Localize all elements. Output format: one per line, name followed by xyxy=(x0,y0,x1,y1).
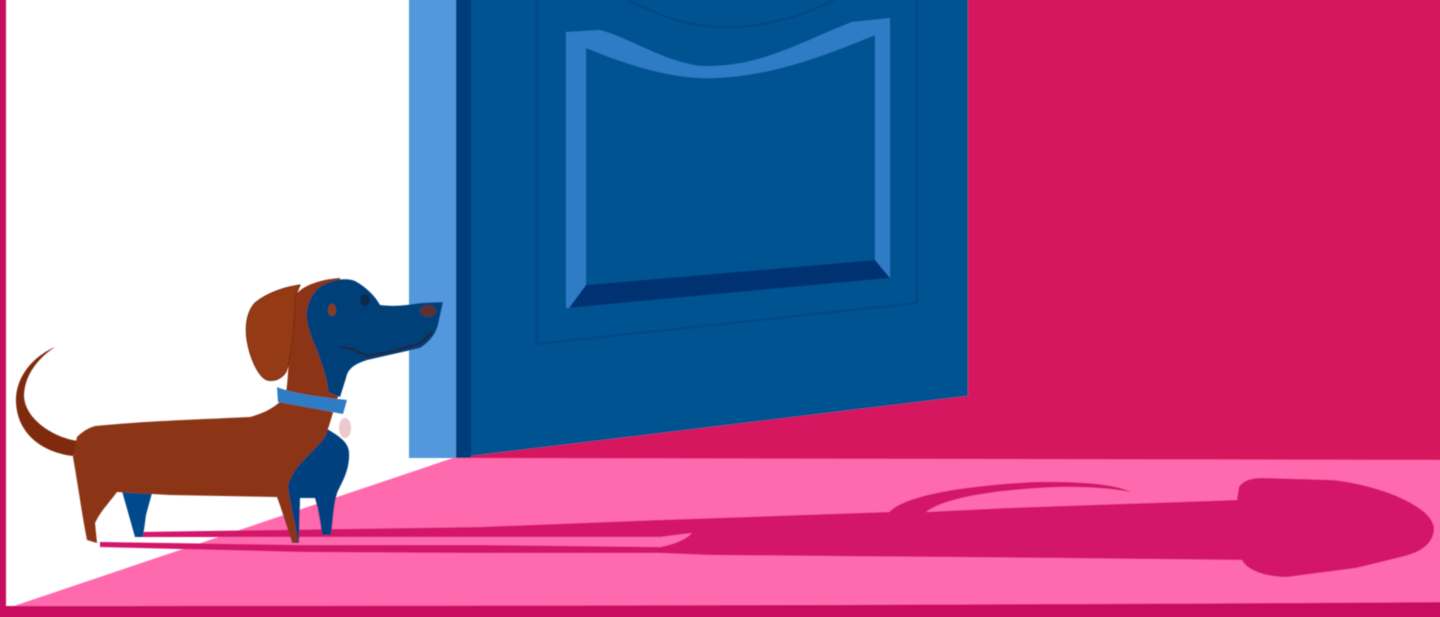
door panel shadow bevel xyxy=(569,260,890,308)
dog mouth xyxy=(340,332,433,356)
dog far eye xyxy=(360,294,370,306)
dog ear xyxy=(246,285,300,381)
dog collar xyxy=(277,387,347,414)
dog back leg (far) xyxy=(122,491,152,537)
door inner panel xyxy=(586,35,875,285)
dog head xyxy=(307,279,443,397)
dog nose xyxy=(420,305,436,317)
cast shadow of the dog on the floor xyxy=(100,478,1434,577)
door xyxy=(409,0,968,458)
pink floor xyxy=(8,458,1440,608)
door outer panel outline xyxy=(537,0,917,344)
door jamb xyxy=(409,0,457,458)
door inner panel frame xyxy=(566,18,890,308)
dog body xyxy=(73,278,345,543)
dog front leg and chest (blue) xyxy=(285,425,349,543)
dog xyxy=(16,278,443,543)
door top arc xyxy=(628,0,834,27)
dog tail xyxy=(16,347,78,456)
magenta wall beyond door xyxy=(458,0,1440,460)
door hinge edge xyxy=(456,0,471,458)
door slab xyxy=(471,0,968,456)
dog tag xyxy=(339,418,351,438)
dog eye xyxy=(328,304,336,316)
